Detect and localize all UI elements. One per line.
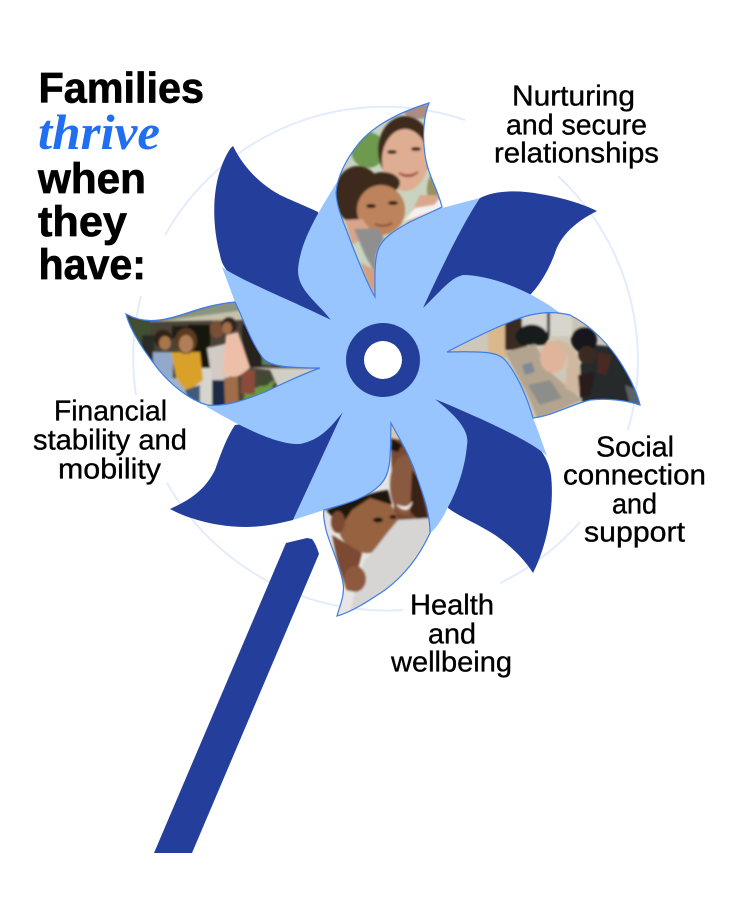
photo petal: parent and daughter xyxy=(335,102,443,299)
photo petal: friends embracing xyxy=(446,312,641,419)
label: social connection and support: connection xyxy=(563,460,706,492)
label: social connection and support: Social xyxy=(596,432,674,464)
title: Families xyxy=(38,64,204,112)
pinwheel light body xyxy=(207,182,600,533)
label: health and wellbeing: and xyxy=(428,618,476,650)
pinwheel hub xyxy=(346,323,420,397)
label: nurturing and secure relationships: Nurturing xyxy=(512,80,635,112)
label: social connection and support: and xyxy=(612,488,657,520)
label: social connection and support: support xyxy=(584,516,685,548)
title: they xyxy=(38,198,127,246)
label: financial stability and mobility: Financial xyxy=(54,396,167,428)
photo petal: family outside home xyxy=(125,301,320,406)
label: health and wellbeing xyxy=(390,590,512,678)
title: thrive xyxy=(38,104,160,160)
title xyxy=(37,64,204,289)
stem xyxy=(154,538,319,853)
pinwheel dark petals xyxy=(170,146,597,573)
title: have: xyxy=(38,241,146,289)
label: financial stability and mobility xyxy=(33,396,187,486)
photo petal: mother and baby xyxy=(320,420,435,620)
label: financial stability and mobility: stability and xyxy=(33,424,187,456)
label: health and wellbeing: wellbeing xyxy=(390,646,512,678)
label: social connection and support xyxy=(563,432,706,548)
faint ring xyxy=(133,107,638,611)
pinwheel infographic xyxy=(34,71,704,853)
title: when xyxy=(37,155,146,203)
label: nurturing and secure relationships: relationships xyxy=(494,138,659,170)
label: nurturing and secure relationships: and secure xyxy=(506,110,647,142)
label: financial stability and mobility: mobility xyxy=(58,454,162,486)
label: nurturing and secure relationships xyxy=(494,80,659,170)
label: health and wellbeing: Health xyxy=(410,590,494,622)
